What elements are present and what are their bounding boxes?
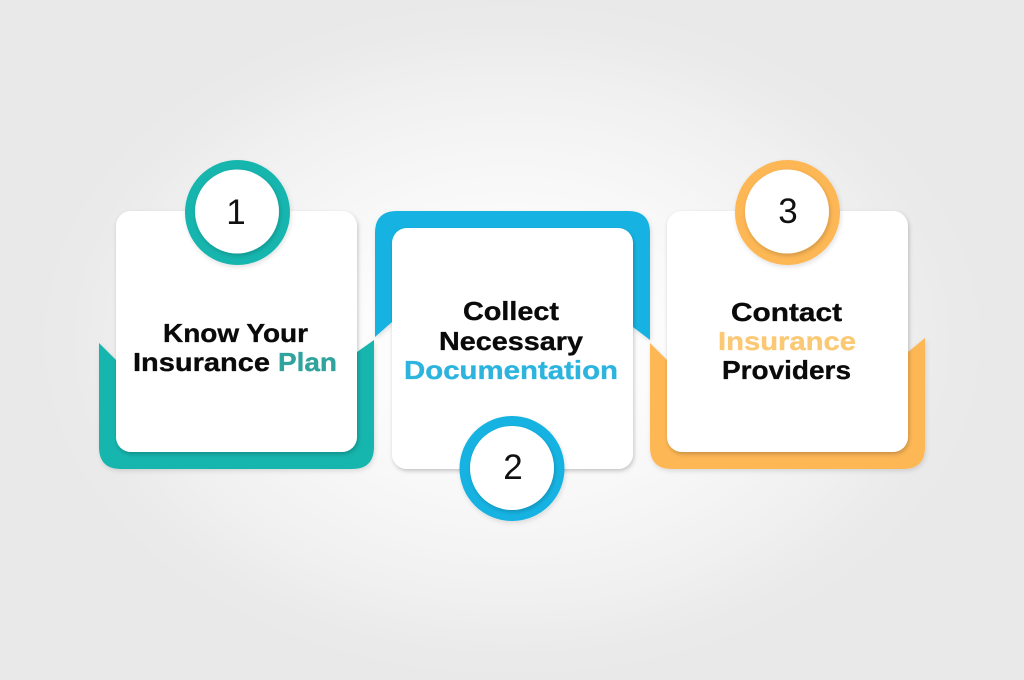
white card bbox=[392, 228, 633, 469]
white card bbox=[116, 211, 357, 452]
heading: Collect Necessary Documentation bbox=[404, 296, 618, 385]
panel: step 2 bbox=[375, 211, 650, 521]
number badge 3 bbox=[735, 160, 840, 265]
panel: step 3 bbox=[650, 160, 925, 469]
number badge 1: 1 bbox=[226, 193, 246, 232]
heading: Know Your Insurance Plan: Insurance bbox=[133, 347, 270, 377]
orange backing shape bbox=[650, 338, 925, 469]
heading: Contact Insurance Providers: Insurance bbox=[718, 326, 856, 356]
heading: Know Your Insurance Plan bbox=[133, 318, 337, 377]
heading: Know Your Insurance Plan: Know Your bbox=[163, 318, 308, 348]
heading: Collect Necessary Documentation: Documentation bbox=[404, 355, 618, 385]
white card bbox=[667, 211, 908, 452]
heading: Collect Necessary Documentation: Necessary bbox=[439, 326, 584, 356]
panel: step 1 bbox=[99, 160, 374, 469]
heading: Contact Insurance Providers: Contact bbox=[731, 297, 842, 327]
number badge 2: 2 bbox=[503, 448, 523, 487]
heading: Contact Insurance Providers: Providers bbox=[722, 355, 851, 385]
heading: Know Your Insurance Plan: Plan bbox=[278, 347, 337, 377]
number badge 2 bbox=[460, 416, 564, 521]
heading: Collect Necessary Documentation: Collect bbox=[463, 296, 559, 326]
number badge 1 bbox=[185, 160, 290, 265]
blue backing shape bbox=[375, 211, 650, 340]
heading: Contact Insurance Providers bbox=[718, 297, 856, 385]
teal backing shape bbox=[99, 340, 374, 469]
number badge 3: 3 bbox=[778, 192, 798, 231]
